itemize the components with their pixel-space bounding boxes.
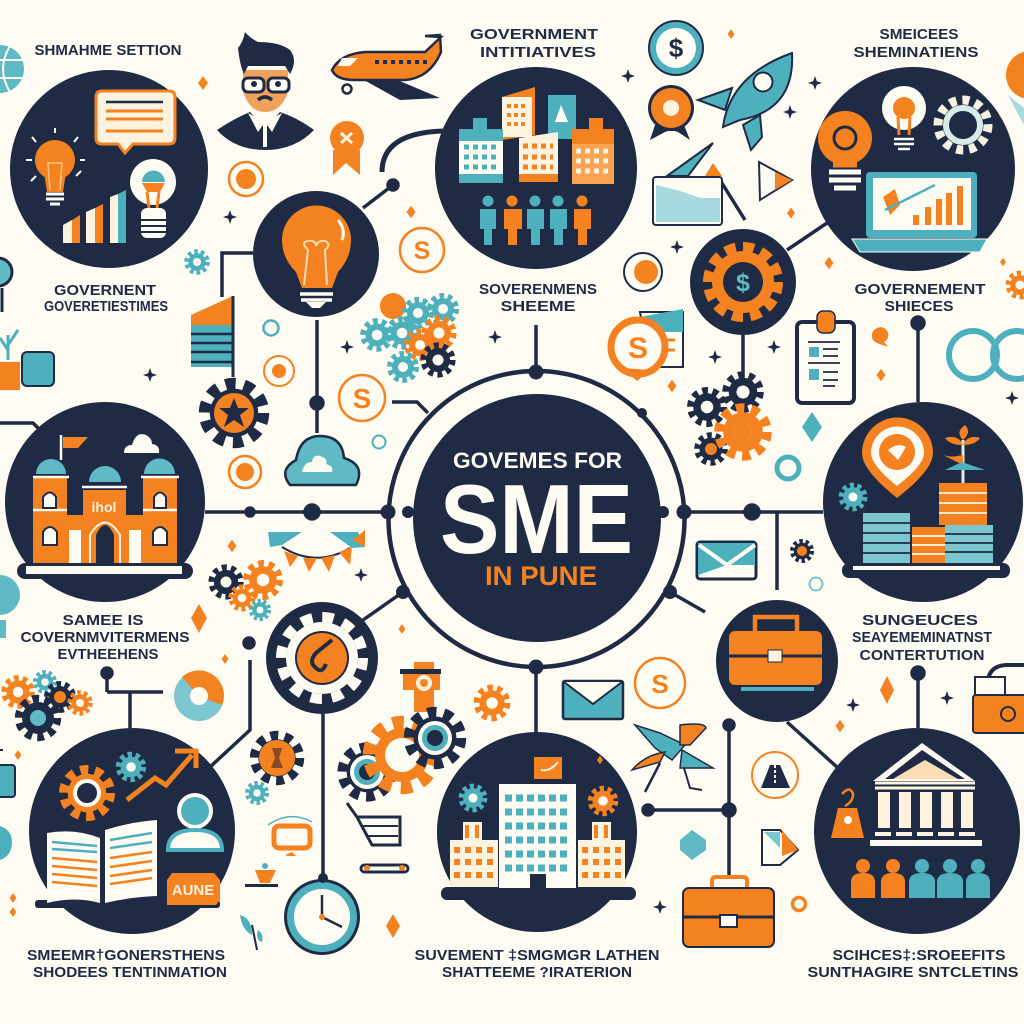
heading: left lower: SAMEE IS <box>62 612 144 629</box>
icon: award medal <box>648 85 694 140</box>
heading: right lower: CONTERTUTION <box>860 647 984 664</box>
icon: small ring right <box>810 578 822 590</box>
icon: orange bulb <box>282 206 351 308</box>
heading: bottom centre: SUVEMENT ‡SMGMGR LATHEN <box>414 947 660 964</box>
gear cluster: far left <box>4 672 90 737</box>
icon: rocket <box>698 53 792 150</box>
icon: drone wing right <box>680 724 713 790</box>
decorative: diamonds left lower <box>10 750 22 917</box>
icon: globe left lower <box>0 575 20 638</box>
icon: small gear mid right <box>792 541 812 561</box>
icon: S coin lower: S <box>353 383 371 414</box>
icon: dollar coin top: $ <box>669 33 684 63</box>
icon: weight bag <box>752 752 798 798</box>
icon: small gears <box>461 786 615 813</box>
icon: globe top left <box>0 45 24 93</box>
icon: large orange bulb <box>818 111 872 188</box>
icon: cloud <box>285 436 359 485</box>
icon: chain links <box>949 331 1024 379</box>
heading: left upper: GOVERETIESTIMES <box>44 298 168 315</box>
icon: briefcase <box>729 617 822 691</box>
icon: S coin lower <box>339 375 385 421</box>
gear cluster: right upper <box>691 375 766 463</box>
icon: gear with badge <box>255 736 299 780</box>
icon: S tag: S <box>651 669 669 699</box>
heading: bottom left: SHODEES TENTINMATION <box>33 964 227 981</box>
icon: dollar coin top <box>649 21 703 75</box>
panel: central bulb circle <box>253 191 379 317</box>
heading: bottom right: SCIHCES‡:SROEEFITS <box>832 947 1006 964</box>
icon: rising arrow <box>127 751 196 800</box>
icon: leaf sprig <box>240 915 262 950</box>
icon: drone plane <box>632 725 712 792</box>
icon: teal person <box>168 795 222 850</box>
heading: left upper <box>44 282 168 315</box>
icon: document pair <box>762 830 798 865</box>
heading: left lower: COVERNMVITERMENS <box>20 629 189 646</box>
gear cluster: left middle <box>212 564 279 619</box>
icon: person with glasses <box>217 32 314 150</box>
heading: right upper: SHIECES <box>884 298 954 315</box>
icon: star gear <box>205 384 263 442</box>
heading: left lower <box>20 612 189 663</box>
heading: top right: SMEICEES <box>880 26 958 43</box>
heading: centre upper <box>479 281 597 315</box>
icon: dollar speech bubble: S <box>628 332 648 365</box>
icon: ring teal <box>777 457 799 479</box>
tag: AUNE <box>167 873 220 905</box>
icon: bank <box>870 743 982 846</box>
heading: right upper: GOVERNEMENT <box>854 281 986 298</box>
icon: teal gear <box>119 755 143 779</box>
icon: clock <box>284 873 360 955</box>
heading: top centre <box>470 26 598 61</box>
icon: people row <box>851 859 990 898</box>
icon: message tag <box>268 817 312 856</box>
heading: bottom right <box>808 947 1018 981</box>
icon: envelope bottom <box>563 681 623 719</box>
heading: left upper: GOVERNENT <box>54 282 156 299</box>
decorative: diamonds right lower <box>836 676 954 732</box>
icon: small coin top <box>229 162 263 196</box>
gear cluster: upper centre <box>363 293 456 380</box>
icon: orange speech bubble right <box>872 327 888 347</box>
icon: magnifier left <box>0 258 12 312</box>
icon: row of people <box>480 196 591 245</box>
icon: cross gears orange <box>400 662 441 712</box>
title hub <box>380 364 692 674</box>
icon: orange diamond bottom <box>386 914 400 938</box>
icon: palace <box>17 434 193 579</box>
heading: centre upper: SOVERENMENS <box>479 281 597 298</box>
pipe arc <box>382 131 443 172</box>
heading: top centre: GOVERNMENT <box>470 26 598 43</box>
panel: gear dollar circle <box>690 229 796 335</box>
icon: airplane <box>332 35 441 100</box>
icon: S coin <box>400 228 444 272</box>
panel: top right laptop <box>811 67 1015 271</box>
heading: right lower <box>852 612 992 664</box>
heading: bottom centre: SHATTEEME ?IRATERION <box>442 964 632 981</box>
icon: small coin <box>229 456 261 488</box>
heading: bottom centre <box>414 947 660 981</box>
icon: envelope mid right <box>697 542 756 579</box>
icon: left box <box>0 750 15 797</box>
heading: right lower: SUNGEUCES <box>862 612 978 629</box>
icon: small ring lower <box>372 436 386 448</box>
icon: teal small gear upper left <box>187 252 207 272</box>
title hub: IN PUNE <box>485 561 597 591</box>
icon: open book <box>47 820 157 903</box>
icon: speech bubble <box>96 91 175 153</box>
icon: flag <box>534 757 562 779</box>
connector lines <box>0 180 924 880</box>
icon: small scale <box>245 863 278 887</box>
panel: bottom centre office <box>437 732 637 932</box>
icon: coin stacks <box>853 483 1000 570</box>
icon: large briefcase <box>683 877 774 947</box>
icon: small teal gear <box>247 783 267 803</box>
heading: left lower: EVTHEEHENS <box>58 646 158 663</box>
icon: gear ring <box>938 100 988 150</box>
panel: briefcase circle <box>716 600 838 722</box>
heading: top centre: INTITIATIVES <box>480 44 596 61</box>
icon: small orange gear <box>477 688 507 718</box>
icon: small coin mid <box>264 356 294 386</box>
icon: plant <box>943 425 985 483</box>
icon: star bottom centre <box>653 900 667 914</box>
icon: right edge gear <box>1008 273 1024 297</box>
icon: bookmark badge <box>330 121 364 175</box>
icon: small tag triangle <box>759 162 792 200</box>
icon: dollar speech bubble <box>611 309 683 381</box>
heading: bottom right: SUNTHAGIRE SNTCLETINS <box>808 964 1018 981</box>
icon: plant and coins left <box>0 330 54 390</box>
icon: orange lock bag <box>831 790 864 838</box>
icon: small teal shield <box>680 830 706 860</box>
panel: right finance <box>823 402 1023 602</box>
decorative accents <box>143 29 1019 764</box>
icon: orange gear <box>64 770 110 816</box>
title hub: SME <box>440 464 633 574</box>
icon: clipboard tablet <box>797 311 854 403</box>
heading: bottom left <box>27 947 227 981</box>
panel: bottom right institution <box>814 728 1020 934</box>
tag: AUNE: AUNE <box>172 882 214 899</box>
icon: small bulb <box>882 86 926 149</box>
gear cluster: bottom centre <box>343 713 460 796</box>
panel: top centre buildings and people <box>435 67 637 269</box>
heading: right upper <box>854 281 986 315</box>
heading: centre upper: SHEEME <box>500 298 576 315</box>
icon: left block <box>450 822 498 887</box>
bar chart <box>63 190 126 243</box>
icon: bunting <box>268 530 365 572</box>
icon: orange light bulb <box>26 128 85 204</box>
icon: left teal badge <box>0 826 12 860</box>
icon: small orange ring gear <box>792 898 806 910</box>
title hub: GOVEMES FOR <box>453 448 622 473</box>
icon: shopping cart <box>347 803 408 872</box>
heading: top right <box>854 26 978 61</box>
icon: S tag <box>635 658 685 708</box>
heading: top left: SHMAHME SETTION <box>34 42 181 59</box>
heading: bottom left: SMEEMR†GONERSTHENS <box>27 947 225 964</box>
icon: disc chart <box>174 670 224 721</box>
icon: orange diamond <box>191 604 207 633</box>
icon: S coin: S <box>414 237 430 265</box>
icon: white light bulb <box>130 159 176 238</box>
panel: gear circle lower <box>266 602 378 714</box>
icon: small gear <box>841 485 865 509</box>
panel: bottom left book <box>29 728 235 934</box>
icon: wallet card <box>653 143 722 225</box>
heading: top right: SHEMINATIENS <box>854 44 978 61</box>
icon: palace: ihol <box>92 499 116 515</box>
icon: office tower <box>499 784 576 888</box>
icon: striped chart <box>191 296 233 377</box>
icon: small coin lower top <box>624 253 662 291</box>
icon: right block <box>578 822 625 887</box>
heading: right lower: SEAYEMEMINATNST <box>852 629 992 646</box>
icon: laptop chart <box>852 172 987 252</box>
icon: small ring <box>264 320 278 336</box>
panel: top left innovation <box>10 70 208 268</box>
icon: buildings <box>459 87 614 184</box>
panel: left palace <box>5 402 205 602</box>
panel: gear dollar circle: $ <box>736 269 750 297</box>
icon: teal diamond <box>802 412 822 442</box>
icon: map pin <box>862 417 933 498</box>
icon: right edge badge <box>1006 51 1024 125</box>
icon: padlock right <box>973 665 1024 733</box>
